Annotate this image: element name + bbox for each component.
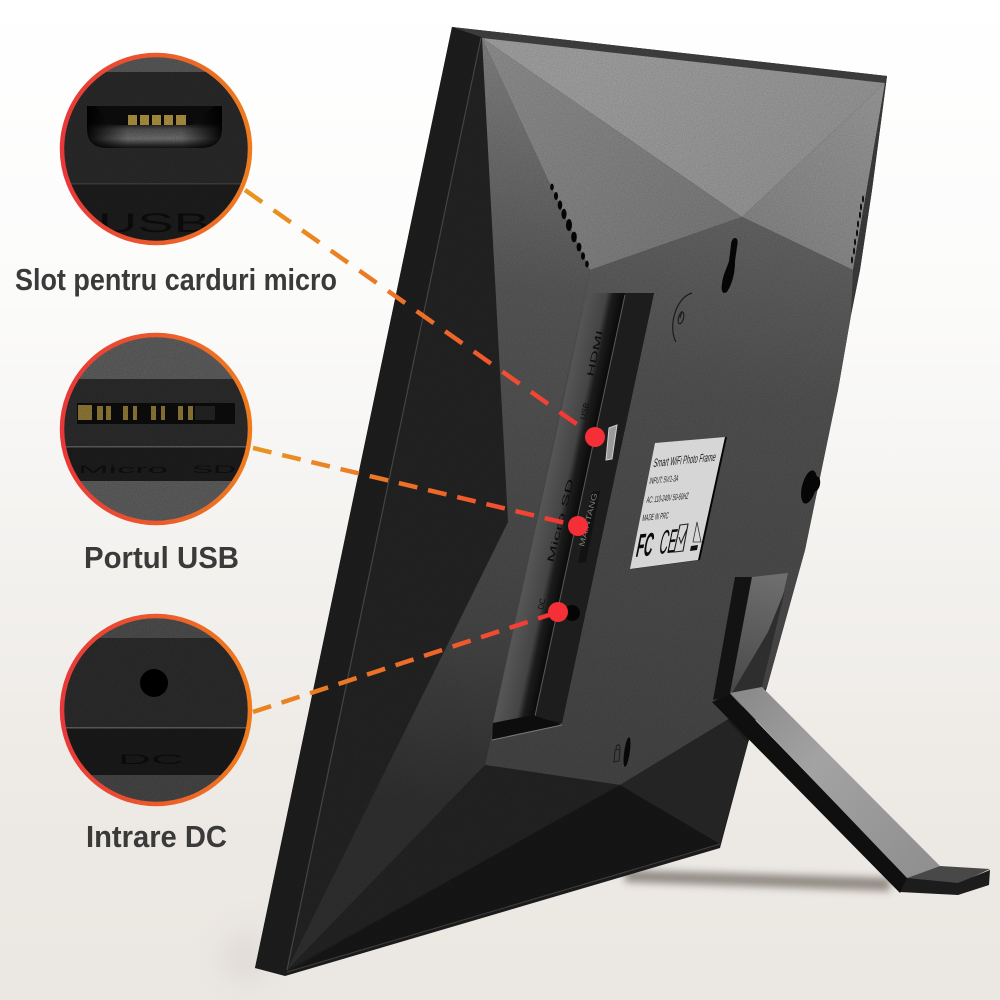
stand: foot front bbox=[900, 870, 990, 895]
speaker holes right bbox=[851, 196, 864, 264]
red marker: USB port bbox=[568, 516, 588, 536]
frame: lower right facet bbox=[620, 720, 748, 844]
port name: USB: USB bbox=[578, 402, 591, 420]
lower dark band bbox=[60, 728, 252, 775]
DC imprint: DC bbox=[118, 751, 184, 767]
band highlight bbox=[71, 183, 241, 184]
frame: central plate bbox=[485, 217, 853, 785]
bottom grey band bbox=[92, 775, 220, 802]
connector opening bbox=[87, 126, 222, 148]
recess port panel bbox=[535, 293, 654, 723]
stand: block lower facet bbox=[732, 590, 785, 693]
frame: edge highlight line bbox=[287, 38, 481, 970]
slot opening bbox=[77, 403, 235, 424]
callout circle: micro SD slot close-up bbox=[60, 333, 252, 525]
frame: long grey left facet bbox=[287, 38, 590, 970]
frame silhouette bbox=[255, 27, 887, 976]
USB imprint: USB bbox=[98, 208, 210, 238]
label shadow bbox=[632, 437, 727, 569]
port name: DC: DC bbox=[536, 597, 548, 610]
recess outline bbox=[493, 293, 654, 740]
slot inner grey bbox=[195, 406, 215, 420]
stand: support block dark edge bbox=[713, 577, 752, 700]
label plate bbox=[630, 437, 725, 569]
lower dark band bbox=[60, 447, 252, 481]
frame: top facet bbox=[482, 38, 885, 217]
dashed line: micro card slot bbox=[245, 190, 595, 437]
ring bbox=[62, 55, 250, 243]
stand: leg black underside bbox=[712, 694, 908, 893]
recess lip bbox=[492, 725, 562, 740]
red marker: micro card slot bbox=[585, 427, 605, 447]
jack hole bbox=[140, 669, 168, 697]
gold contacts bbox=[78, 405, 193, 420]
gold pins bbox=[128, 115, 186, 125]
callout circle: DC jack close-up bbox=[60, 614, 252, 807]
frame: top edge bbox=[452, 27, 887, 83]
label recycle bin icon bbox=[690, 522, 701, 551]
power button bbox=[673, 293, 692, 342]
DC jack bbox=[564, 605, 580, 621]
connector tongue bbox=[112, 109, 192, 125]
frame: upper right facet bbox=[742, 83, 885, 270]
micro USB port bbox=[606, 425, 617, 460]
frame: bottom facet bbox=[287, 785, 720, 972]
picture frame back bbox=[250, 20, 890, 980]
port recess bbox=[492, 293, 654, 740]
dashed line: USB port bbox=[253, 448, 578, 526]
SD slot marking: MAINTANG bbox=[577, 492, 599, 547]
band highlight bbox=[60, 446, 252, 448]
stand: leg grey face bbox=[730, 687, 940, 878]
top grey band bbox=[106, 57, 206, 72]
rating label: MADE IN PRC bbox=[642, 510, 670, 523]
rating label: INPUT: 5V/1-3A bbox=[649, 473, 680, 486]
keyhole right bbox=[798, 469, 822, 505]
grain bbox=[68, 618, 244, 802]
rating label bbox=[630, 437, 727, 569]
Micro imprint: Micro bbox=[78, 464, 168, 476]
band highlight bbox=[60, 727, 252, 728]
stand: foot top bbox=[907, 866, 990, 884]
red marker: DC input bbox=[548, 602, 568, 622]
rating label: AC: 110-240V 50-60HZ bbox=[646, 491, 690, 505]
dark band bbox=[60, 379, 252, 447]
speaker holes left bbox=[550, 184, 589, 267]
ring bbox=[62, 335, 250, 523]
grain bbox=[66, 338, 245, 520]
rating label: FC bbox=[633, 527, 657, 565]
recess left wall bbox=[493, 293, 625, 723]
heading: USB port: Portul USB bbox=[84, 540, 239, 575]
frame: bottom lip line bbox=[287, 844, 720, 972]
stand: support block face bbox=[730, 573, 788, 693]
top grey band bbox=[100, 618, 212, 638]
heading: DC input: Intrare DC bbox=[86, 819, 227, 854]
dashed line: DC input bbox=[253, 612, 558, 712]
frame: right edge bbox=[851, 76, 887, 315]
frame: surface grain bbox=[450, 30, 884, 782]
SD imprint: SD bbox=[192, 464, 236, 476]
connector shading bbox=[87, 106, 222, 148]
frame: upper left facet bbox=[482, 38, 742, 270]
recess highlight line bbox=[535, 295, 625, 716]
label check box icon bbox=[674, 524, 688, 552]
ring bbox=[62, 616, 250, 804]
floor shadows bbox=[215, 870, 890, 985]
frame: lower left bottom facet bbox=[287, 765, 620, 970]
frame: left edge strip bbox=[255, 27, 481, 974]
callout circle: USB connector close-up bbox=[60, 53, 252, 246]
port name: HDMI: HDMI bbox=[585, 329, 605, 377]
callout lines bbox=[245, 190, 605, 712]
lock icon bbox=[614, 737, 632, 767]
lower dark band bbox=[72, 184, 240, 240]
stand bbox=[712, 573, 990, 895]
frame: speckled dark left facet bbox=[287, 38, 508, 970]
grain bbox=[73, 58, 240, 184]
rating label: Smart WiFi Photo Frame bbox=[652, 450, 717, 470]
port name: Micro SD: Micro SD bbox=[545, 477, 576, 563]
heading: micro card slot: Slot pentru carduri micro bbox=[15, 262, 337, 297]
keyhole top bbox=[722, 238, 738, 293]
rating label: CE bbox=[656, 523, 680, 562]
recess floor bbox=[492, 715, 562, 740]
micro SD slot bbox=[578, 491, 600, 563]
